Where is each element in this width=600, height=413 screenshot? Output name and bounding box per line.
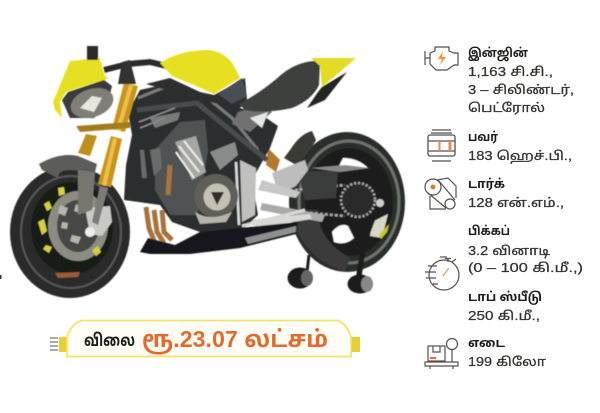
side stripes xyxy=(50,338,58,350)
power text: 183 ஹெச்.பி., xyxy=(468,149,572,164)
icon: stopwatch xyxy=(425,257,459,290)
weight text: எடை xyxy=(468,336,506,350)
belly pan xyxy=(140,210,305,254)
front fender xyxy=(39,155,97,215)
spec: pickup: 3.2 வினாடி xyxy=(468,244,550,259)
torque text: 128 என்.எம்., xyxy=(468,196,564,210)
spec: pickup xyxy=(468,223,583,275)
speck xyxy=(0,275,2,279)
spec: torque xyxy=(425,177,564,210)
icon: torque belt xyxy=(425,178,456,209)
spec: top speed: 250 கி.மீ., xyxy=(468,309,540,323)
engine text: 3 – சிலிண்டர், xyxy=(468,83,574,97)
front tyre xyxy=(10,166,130,298)
gold front fork xyxy=(76,83,138,225)
motorcycle illustration xyxy=(10,46,405,298)
engine text: இன்ஜின் xyxy=(468,45,528,62)
weight text xyxy=(468,336,546,369)
rear fork leg xyxy=(78,134,97,156)
power text xyxy=(468,130,572,164)
engine text: 1,163 சி.சி., xyxy=(468,65,553,79)
banner box xyxy=(67,320,351,356)
torque text: டார்க் xyxy=(468,177,505,191)
frame and engine mass xyxy=(124,82,278,232)
weight text: 199 கிலோ xyxy=(468,355,546,369)
reservoir cap xyxy=(87,46,98,60)
icon: weighing scale xyxy=(425,338,458,369)
paddock stand xyxy=(288,199,384,294)
headlight xyxy=(67,83,117,123)
hugger and shock xyxy=(258,131,316,172)
yellow fairing xyxy=(53,58,112,118)
exhaust headers xyxy=(146,165,172,243)
price value: ரூ.23.07 லட்சம் xyxy=(142,326,328,355)
spec: top speed: டாப் ஸ்பீடு xyxy=(468,289,542,306)
icon: engine warning xyxy=(425,47,458,70)
engine text xyxy=(468,45,574,115)
price label: விலை xyxy=(84,331,135,350)
seat xyxy=(239,61,320,112)
spec: power xyxy=(428,130,572,164)
spec: pickup: பிக்கப் xyxy=(468,223,510,238)
engine text: பெட்ரோல் xyxy=(468,101,545,115)
spec: engine xyxy=(425,45,574,115)
chain and sprocket xyxy=(275,165,375,217)
torque text xyxy=(468,177,564,210)
price banner xyxy=(50,320,360,356)
right tab xyxy=(351,337,360,352)
power text: பவர் xyxy=(468,130,498,144)
rear tyre xyxy=(289,132,405,272)
swingarm plate xyxy=(250,160,325,228)
tail xyxy=(307,58,356,108)
handlebar xyxy=(104,60,199,84)
spec: top speed xyxy=(468,289,542,323)
spec: weight xyxy=(425,336,546,369)
icon: motor xyxy=(428,130,455,161)
spec: pickup: (0 – 100 கி.மீ.,) xyxy=(468,261,583,275)
left tab xyxy=(59,337,68,352)
engine clutch cover xyxy=(194,174,238,224)
yellow tank xyxy=(146,50,247,108)
